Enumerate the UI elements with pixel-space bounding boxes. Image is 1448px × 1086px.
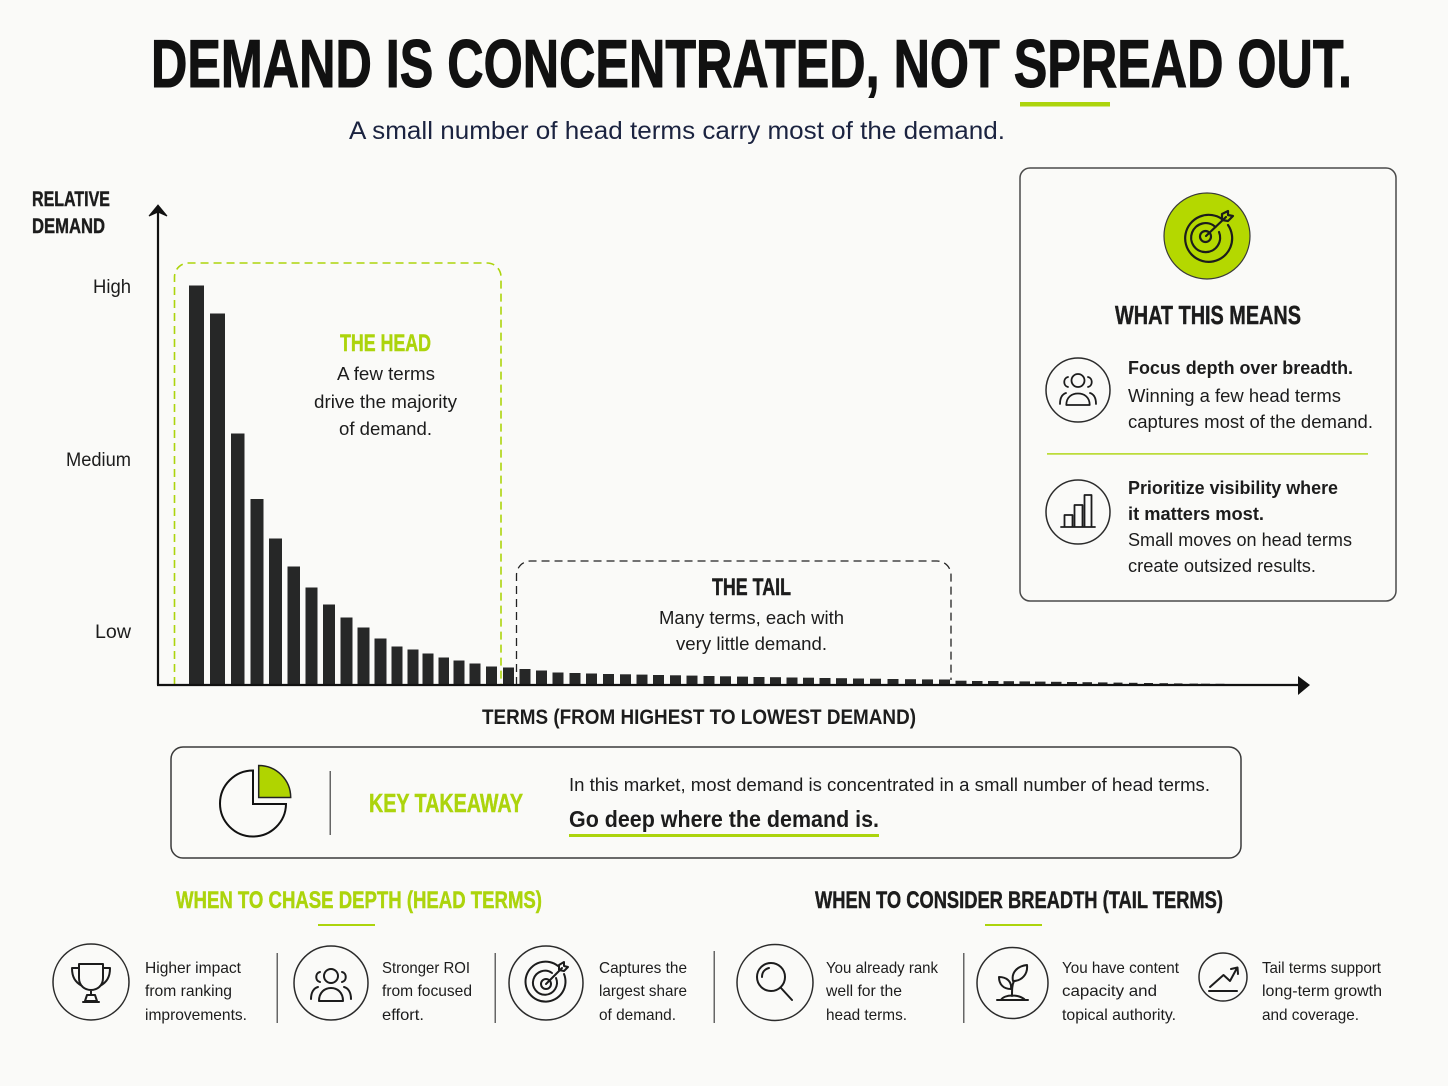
head bracket <box>174 263 501 685</box>
text: higher impact <box>145 960 247 1024</box>
head label: drive the majority <box>314 391 458 412</box>
text: stronger roi: effort. <box>382 1007 424 1024</box>
y axis title <box>32 188 110 238</box>
heading: consider breadth: WHEN TO CONSIDER BREADTH (TAIL TERMS) <box>815 887 1223 914</box>
bar chart <box>189 286 1238 685</box>
text: higher impact: improvements. <box>145 1007 247 1024</box>
head label: of demand. <box>339 418 432 439</box>
tail bracket <box>516 561 951 685</box>
text: focus depth <box>1128 357 1373 432</box>
icon: growth chart <box>1199 953 1247 1001</box>
axes <box>149 205 1310 695</box>
icon: trophy <box>53 944 129 1020</box>
icon: pie chart <box>220 766 291 836</box>
icon: people <box>1046 358 1110 422</box>
text: captures: Captures the <box>599 960 687 977</box>
text: captures: of demand. <box>599 1007 676 1024</box>
head label: THE HEAD <box>340 330 431 357</box>
panel: what this means <box>1020 168 1396 601</box>
takeaway heading: KEY TAKEAWAY <box>369 788 523 818</box>
text: focus depth: Focus depth over breadth. <box>1128 357 1353 378</box>
text: tail support: long-term growth <box>1262 983 1382 1000</box>
text: prioritize visibility: create outsized results. <box>1128 555 1316 576</box>
head label: A few terms <box>337 363 435 384</box>
y axis labels: High <box>93 277 131 298</box>
y axis labels <box>66 277 131 643</box>
text: already rank: head terms. <box>826 1007 907 1024</box>
y axis title: RELATIVE <box>32 188 110 211</box>
text: focus depth: Winning a few head terms <box>1128 385 1341 406</box>
text: prioritize visibility <box>1128 477 1352 576</box>
text: content capacity: capacity and <box>1062 983 1157 1000</box>
text: higher impact: from ranking <box>145 983 232 1000</box>
tail label: very little demand. <box>676 633 827 654</box>
text: tail support <box>1262 960 1382 1024</box>
text: stronger roi <box>382 960 472 1024</box>
icon: people <box>294 946 368 1020</box>
icon: bar chart <box>1046 480 1110 544</box>
x axis title: TERMS (FROM HIGHEST TO LOWEST DEMAND) <box>482 706 916 729</box>
text: already rank: well for the <box>825 983 902 1000</box>
icon: magnifier <box>737 944 813 1020</box>
text: content capacity: topical authority. <box>1062 1007 1176 1024</box>
heading: chase depth: WHEN TO CHASE DEPTH (HEAD TERMS) <box>176 887 542 914</box>
y axis labels: Low <box>95 622 131 643</box>
subtitle: A small number of head terms carry most of the demand. <box>349 117 1005 145</box>
takeaway text <box>569 774 1210 837</box>
y axis title: DEMAND <box>32 215 105 238</box>
panel heading: WHAT THIS MEANS <box>1115 300 1301 330</box>
panel: key takeaway <box>171 747 1241 858</box>
takeaway text: Go deep where the demand is. <box>569 806 879 832</box>
text: content capacity <box>1062 960 1180 1024</box>
icon: target badge <box>1164 193 1250 279</box>
text: captures: largest share <box>599 983 687 1000</box>
text: stronger roi: Stronger ROI <box>382 960 470 977</box>
text: focus depth: captures most of the demand. <box>1128 411 1373 432</box>
icon: target <box>509 946 583 1020</box>
text: already rank <box>825 960 939 1024</box>
takeaway text: In this market, most demand is concentrated in a small number of head terms. <box>569 774 1210 795</box>
icon: sprout <box>977 948 1048 1018</box>
tail label: Many terms, each with <box>659 607 844 628</box>
tail label: THE TAIL <box>712 574 791 601</box>
text: stronger roi: from focused <box>382 983 472 1000</box>
text: content capacity: You have content <box>1062 960 1180 977</box>
text: tail support: Tail terms support <box>1262 960 1382 977</box>
text: prioritize visibility: it matters most. <box>1128 503 1264 524</box>
y axis labels: Medium <box>66 450 131 471</box>
text: higher impact: Higher impact <box>145 960 242 977</box>
text: already rank: You already rank <box>826 960 939 977</box>
text: captures <box>599 960 687 1024</box>
head label <box>314 330 458 439</box>
text: tail support: and coverage. <box>1262 1007 1359 1024</box>
tail label <box>659 574 844 654</box>
text: prioritize visibility: Small moves on head terms <box>1128 529 1352 550</box>
text: prioritize visibility: Prioritize visibility where <box>1128 477 1338 498</box>
